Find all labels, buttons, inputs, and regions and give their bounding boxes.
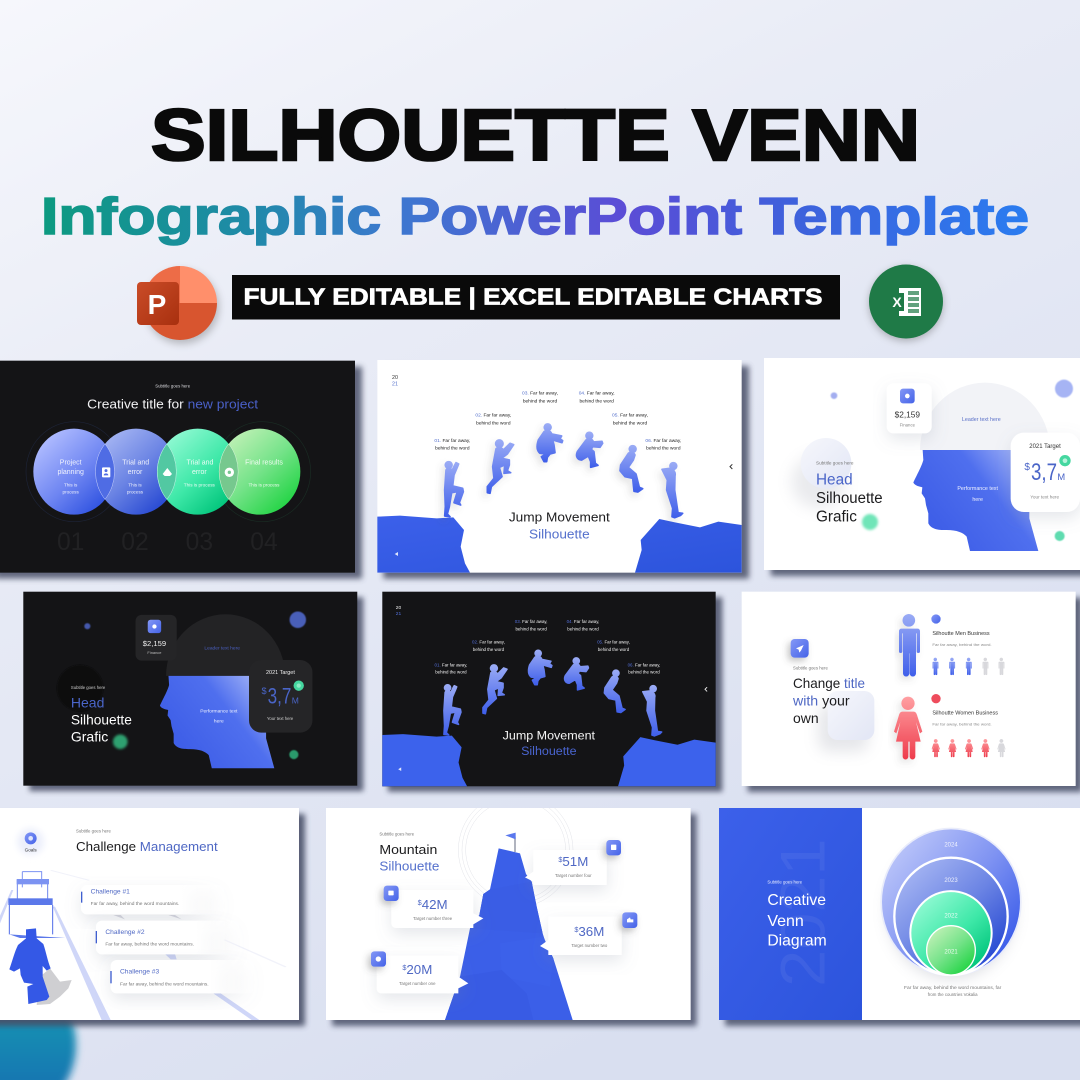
accent balls [831,380,1073,541]
callout: 42M [384,886,483,928]
head labels: here [972,497,983,503]
blue side panel: Subtitle goes here [767,880,803,885]
slide heading [76,828,218,854]
decorative teal blob [0,973,76,1080]
step numbers [57,529,278,556]
head labels [957,417,1001,503]
goals badge: Goals [25,847,37,852]
finance card: $2,159 [143,639,166,648]
slide heading: Mountain [379,842,437,857]
slide heading: Silhouette [521,744,577,758]
cliffs [382,734,716,786]
banner: FULLY EDITABLE | EXCEL EDITABLE CHARTS [244,284,822,310]
panel: jump movement dark [382,592,722,792]
venn labels [57,459,283,494]
callout: 51M [525,840,621,885]
callout: 36M: $ [574,925,578,934]
step captions: behind the word [435,446,470,452]
venn labels: process [63,489,79,494]
dark circle [57,665,103,711]
challenge card 2 [96,921,239,954]
icon: Excel logo: X [892,294,902,310]
slide heading: Silhouette [71,711,132,727]
venn labels: Trial and [187,459,214,466]
blue side panel: 2021 [768,838,838,987]
mountain [445,848,573,1020]
challenge card 1 [81,885,224,914]
panel: jump movement light [377,360,749,579]
icon: small arrow [395,552,398,556]
target card: M [292,695,299,705]
venn labels: Final results [245,459,283,466]
challenge card 3: Far far away, behind the word mountains. [120,981,209,986]
step captions: 04. Far far away, [579,390,615,396]
runner shadow [37,968,72,1005]
slide heading: Head [816,471,853,488]
target card [1011,433,1080,512]
target card: 3,7 [268,683,291,708]
year label: 20 [392,375,398,381]
men text: Far far away, behind the word. [932,642,992,647]
step captions: 02. Far far away, [475,413,511,419]
target card: 2021 Target [266,670,295,676]
neumorphic square [818,691,874,752]
panel: head silhouette dark [23,592,363,791]
slide heading: Subtitle goes here [76,828,111,833]
target card [249,660,312,733]
callout: 51M: $ [558,855,562,864]
step captions: 01. Far far away, [434,438,470,444]
panel: mountain silhouette [326,793,697,1026]
target card: 3,7 [1031,459,1057,486]
step captions [434,390,681,452]
slide heading [503,729,596,758]
slide heading [816,460,883,526]
concentric rings [458,808,574,904]
goals badge [17,828,44,855]
finance card [136,615,177,661]
accent balls [84,612,306,759]
step captions: behind the word [515,626,547,631]
caption [904,985,1002,997]
slide heading: Change title [793,675,865,691]
challenge card 3: Challenge #3 [120,969,160,976]
challenge card 3 [110,960,254,993]
panel: men and women business [742,592,1080,792]
challenge card 2: Challenge #2 [105,929,145,936]
year labels: 2023 [944,878,958,884]
slide heading: Subtitle goes here [379,831,415,836]
callout: 51M: Target number four [555,873,592,878]
slide heading: Silhouette [529,527,590,542]
slide heading: Head [71,694,104,710]
blue side panel: Creative [767,892,826,909]
step captions: behind the word [567,626,599,631]
runner silhouette [9,928,51,1004]
slide heading: Grafic [71,728,108,744]
year label [396,605,401,617]
step captions: 02. Far far away, [472,640,505,645]
year label: 20 [396,605,401,611]
slide heading: Subtitle goes here [71,685,106,690]
step captions [435,619,660,675]
step captions: 03. Far far away, [522,390,558,396]
jumping silhouettes [444,650,662,736]
blue side panel: Diagram [767,933,827,950]
caption: from the countries Vokalia [928,992,978,997]
callout: 36M [540,912,637,955]
panel: head silhouette light [764,358,1080,576]
callout: 42M: 42M [422,897,448,912]
head labels: here [214,719,224,725]
caption: Far far away, behind the word mountains, far [904,985,1002,990]
callout: 36M: Target number two [571,943,608,948]
venn labels: error [192,469,207,476]
slide heading [509,510,610,542]
women pictogram row [932,739,1006,757]
step captions: behind the word [579,398,614,404]
step numbers: 02 [121,529,149,556]
venn labels: planning [57,469,84,476]
callout: 36M: 36M [578,924,604,939]
head dome [166,614,285,676]
head dome [920,383,1050,450]
men text: Silhoutte Men Business [932,631,990,637]
men pictogram row [933,658,1004,675]
icon: Excel logo [869,264,943,341]
venn labels: Trial and [122,459,149,466]
slide heading: Silhouette [816,490,883,507]
icon: chevron [730,464,732,469]
step numbers: 03 [186,529,213,556]
step captions: behind the word [473,647,505,652]
slide heading: Grafic [816,509,857,526]
women text: Silhoutte Women Business [932,711,998,717]
slide heading: Jump Movement [509,510,610,525]
women figure [894,697,922,759]
callout: 20M: $ [402,963,406,972]
icon: small arrow [398,767,401,771]
slide heading [379,831,439,874]
icon: PowerPoint logo: P [148,289,166,320]
panel: challenge management [0,808,305,1026]
step captions: behind the word [646,446,681,452]
step captions: behind the word [598,647,630,652]
head labels: Leader text here [204,645,240,651]
neumorphic circle [792,438,851,508]
banner [232,275,840,320]
callout: 42M: Target number three [413,916,453,921]
target card: $ [262,686,267,696]
target card: M [1057,472,1065,482]
venn labels: error [128,469,143,476]
head silhouette [160,676,274,768]
year labels: 2021 [944,949,958,955]
head silhouette [913,450,1038,551]
nested venn circles [880,828,1022,978]
slide heading: own [793,710,819,726]
icon: PowerPoint logo [137,266,219,344]
flag [505,833,516,852]
slide heading: Jump Movement [503,729,596,743]
callout: 20M: Target number one [399,981,436,986]
finance card [887,383,932,433]
slide heading [71,685,132,744]
head labels: Performance text [957,486,998,492]
men figure [899,614,920,676]
callout: 20M [371,951,468,993]
blue side panel [719,808,862,1020]
venn labels: This is process [248,483,280,488]
step captions: 06. Far far away, [645,438,681,444]
men text [931,614,992,647]
women text [931,694,998,727]
panel: creative venn diagram [719,808,1080,1026]
year label: 21 [396,611,401,617]
step numbers: 04 [250,529,278,556]
subtitle: Infographic PowerPoint Template [41,188,1029,246]
step captions: behind the word [613,421,647,427]
head labels: Performance text [200,708,238,714]
step captions: behind the word [476,421,511,427]
year labels: 2024 [944,842,958,848]
step captions: 01. Far far away, [435,663,467,668]
target card: 2021 Target [1029,444,1061,450]
target card: $ [1024,462,1030,473]
panel heading: Creative title for new project [87,396,258,411]
head labels: Leader text here [962,417,1001,423]
callout: 42M: $ [418,898,422,907]
venn labels: This is [128,483,142,488]
slide heading: Subtitle goes here [816,460,854,465]
step captions: behind the word [628,670,660,675]
head labels [200,645,240,725]
step captions: 05. Far far away, [612,413,648,419]
jumping silhouettes [445,424,683,518]
slide heading: Challenge Management [76,839,218,854]
panel: creative venn title slide [0,361,362,579]
finance card: Finance [147,650,162,655]
venn labels: This is process [184,483,216,488]
challenge card 1: Far far away, behind the word mountains. [91,901,179,906]
year labels [944,842,958,955]
cliffs [377,516,742,573]
year labels: 2022 [944,913,958,919]
running track [0,870,287,1020]
slide heading: Subtitle goes here [793,666,828,671]
target card: Your text here [1030,494,1059,499]
year label: 21 [392,382,398,388]
blue side panel: Venn [767,913,804,930]
women text: Far far away, behind the word. [932,722,992,727]
challenge card 2: Far far away, behind the word mountains. [105,941,194,946]
step captions: 06. Far far away, [628,663,660,668]
hurdles [8,872,65,938]
step captions: 04. Far far away, [567,619,599,624]
venn labels: Project [60,459,82,466]
slide heading: Silhouette [379,859,439,874]
step captions: 03. Far far away, [515,619,548,624]
challenge card 1: Challenge #1 [91,889,130,896]
panel subtitle: Subtitle goes here [155,384,191,389]
icon: paper plane [791,639,809,658]
venn labels: process [127,489,144,494]
finance card: $2,159 [895,409,920,419]
step numbers: 01 [57,529,84,556]
target card: Your text here [267,716,294,721]
year label [392,375,398,388]
callout: 51M: 51M [562,854,588,869]
venn icons [102,467,234,477]
icon: chevron [705,687,707,691]
step captions: behind the word [435,670,467,675]
slide heading: with your [792,692,850,708]
slide heading [792,666,865,726]
finance card: Finance [900,422,916,427]
callout: 20M: 20M [406,962,432,977]
venn diagram [26,422,311,522]
step captions: behind the word [523,398,557,404]
venn labels: This is [64,483,78,488]
title: SILHOUETTE VENN [151,96,920,176]
step captions: 05. Far far away, [597,640,630,645]
